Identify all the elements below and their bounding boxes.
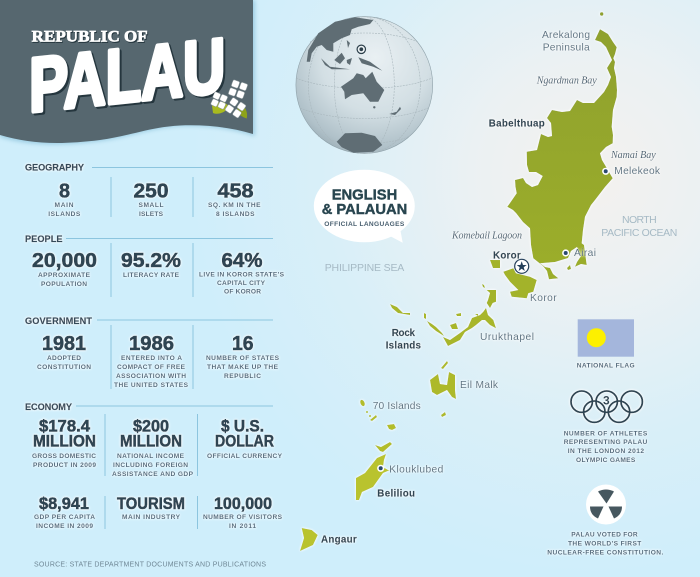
title: palau: PALAU xyxy=(29,23,225,129)
stat: 8 main islands: ISLANDS xyxy=(48,211,81,218)
stat: tourism xyxy=(117,494,185,521)
stat: visitors: IN 2011 xyxy=(229,523,256,530)
marker: melekeok xyxy=(602,168,609,175)
caption: olympic athletes: OLYMPIC GAMES xyxy=(576,457,636,464)
label: arekalong peninsula xyxy=(542,30,590,54)
island: angaur xyxy=(300,528,318,551)
speech bubble: official languages: ENGLISH xyxy=(332,186,397,203)
caption: nuclear-free constitution: THE WORLD'S FIRST xyxy=(568,540,641,548)
stat: currency: OFFICIAL CURRENCY xyxy=(207,453,283,460)
source note: SOURCE: STATE DEPARTMENT DOCUMENTS AND PUBLICATIONS xyxy=(34,562,266,568)
stat: gdp xyxy=(32,417,96,469)
label: klouklubed: Klouklubed xyxy=(389,464,444,475)
stat: 20,000 population: APPROXIMATE xyxy=(38,272,91,279)
speech bubble: official languages: OFFICIAL LANGUAGES xyxy=(324,221,405,228)
stat: 250 small islets xyxy=(134,181,168,218)
stat: 1981 xyxy=(37,333,91,371)
caption: olympic athletes: NUMBER OF ATHLETES xyxy=(564,430,648,437)
stat: gdp: MILLION xyxy=(33,432,96,451)
stat: 16 states: REPUBLIC xyxy=(224,373,261,380)
stat: currency xyxy=(207,417,283,460)
icon: nuclear free symbol xyxy=(586,484,626,524)
stat: national income: INCLUDING FOREIGN xyxy=(113,462,188,469)
icon: flowers and leaves xyxy=(210,80,248,118)
stat: 250 small islets: ISLETS xyxy=(139,211,164,218)
stat: 1986: COMPACT OF FREE xyxy=(117,364,186,371)
stat: 16 states: NUMBER OF STATES xyxy=(206,355,280,362)
islands: 70 islands xyxy=(359,399,396,452)
stat: 20,000 population xyxy=(32,250,97,288)
island: babelthuap xyxy=(507,29,617,279)
stat: 8 main islands xyxy=(48,181,81,218)
marker: klouklubed xyxy=(377,465,384,472)
caption: national flag: NATIONAL FLAG xyxy=(577,362,635,369)
islands: koror xyxy=(482,260,537,308)
islands: urukthapel and rock islands xyxy=(390,304,496,346)
caption: olympic athletes xyxy=(564,430,648,464)
stat: 1986: 1986 xyxy=(129,333,174,355)
heading: people: PEOPLE xyxy=(25,234,62,244)
heading: geography: GEOGRAPHY xyxy=(25,163,84,173)
island: small north islet xyxy=(600,12,603,16)
stat: 1986: ENTERED INTO A xyxy=(121,355,182,362)
stat: currency: $ U.S. xyxy=(221,417,264,436)
label: beliliou: Beliliou xyxy=(377,489,415,500)
stat: 20,000 population: 20,000 xyxy=(32,250,97,272)
label: koror bold: Koror xyxy=(493,250,521,261)
stat: visitors xyxy=(203,494,283,530)
stat: 64% live in koror: LIVE IN KOROR STATE'S xyxy=(199,272,285,278)
marker: airai xyxy=(562,249,569,257)
stat: visitors: 100,000 xyxy=(214,494,272,513)
label: philippine sea: PHILIPPINE SEA xyxy=(325,262,404,274)
panel: facts xyxy=(25,163,285,530)
stat: gdp: PRODUCT IN 2009 xyxy=(33,462,96,469)
speech bubble: official languages xyxy=(314,170,415,243)
stat: national income: ASSISTANCE AND GDP xyxy=(112,471,194,478)
label: north pacific ocean xyxy=(601,214,677,239)
stat: 64% live in koror: CAPITAL CITY xyxy=(217,280,266,287)
map labels xyxy=(321,30,661,546)
caption: nuclear-free constitution: PALAU VOTED FOR xyxy=(571,532,638,539)
stat: gdp per capita: GDP PER CAPITA xyxy=(34,514,95,521)
label: melekeok: Melekeok xyxy=(614,166,661,177)
stat: gdp per capita xyxy=(34,494,95,530)
stat: 458 sq km: SQ. KM IN THE xyxy=(208,202,261,209)
island: eil malk xyxy=(430,361,456,417)
caption: olympic athletes: REPRESENTING PALAU xyxy=(564,439,648,446)
label: eil malk: Eil Malk xyxy=(460,380,499,391)
stat: currency: DOLLAR xyxy=(215,432,274,451)
caption: olympic athletes: IN THE LONDON 2012 xyxy=(568,448,644,455)
stat: 8 main islands: MAIN xyxy=(54,202,74,209)
island: airai islet xyxy=(567,265,571,270)
stat: 458 sq km: 458 xyxy=(218,181,254,203)
label: namai bay: Namai Bay xyxy=(610,150,656,161)
stat: national income: MILLION xyxy=(120,432,182,451)
title: palau: PALAU xyxy=(31,25,227,131)
stat: gdp per capita: $8,941 xyxy=(39,494,89,513)
icon: palau location marker xyxy=(357,45,365,54)
heading: government: GOVERNMENT xyxy=(25,316,92,326)
title: republic of: REPUBLIC OF xyxy=(32,29,148,46)
stat: tourism: TOURISM xyxy=(117,494,185,513)
stat: 250 small islets: 250 xyxy=(134,181,168,203)
stat: 1986 xyxy=(114,333,189,389)
banner xyxy=(0,0,255,144)
label: arekalong peninsula: Arekalong xyxy=(542,30,590,41)
label: urukthapel: Urukthapel xyxy=(480,332,534,343)
title: republic of: REPUBLIC OF xyxy=(32,30,149,47)
stat: 20,000 population: POPULATION xyxy=(41,281,87,288)
stat: 1981: ADOPTED xyxy=(47,355,81,362)
stat: 64% live in koror: OF KOROR xyxy=(224,288,261,296)
map: islands xyxy=(300,12,617,551)
label: ngardman bay: Ngardman Bay xyxy=(536,75,597,86)
label: angaur: Angaur xyxy=(321,535,357,546)
stat: gdp: $178.4 xyxy=(39,417,91,436)
stat: national income: NATIONAL INCOME xyxy=(117,453,185,460)
label: koror: Koror xyxy=(530,293,557,304)
stat: gdp: GROSS DOMESTIC xyxy=(32,453,96,460)
stat: 458 sq km: 8 ISLANDS xyxy=(216,211,255,218)
label: 70 islands: 70 Islands xyxy=(373,401,421,412)
olympic rings xyxy=(564,391,648,464)
label: north pacific ocean: NORTH xyxy=(622,214,657,226)
label: arekalong peninsula: Peninsula xyxy=(543,43,590,54)
label: komebail lagoon: Komebail Lagoon xyxy=(451,231,522,242)
marker: koror capital star xyxy=(515,259,529,273)
caption: nuclear-free constitution: NUCLEAR-FREE CONSTITUTION. xyxy=(547,550,663,556)
label: rock islands xyxy=(386,328,422,352)
caption: nuclear-free constitution xyxy=(547,532,663,556)
stat: 1981: CONSTITUTION xyxy=(37,364,91,371)
stat: 16 states xyxy=(206,333,280,380)
stat: national income xyxy=(112,417,194,478)
heading: economy: ECONOMY xyxy=(25,402,72,412)
label: rock islands: Islands xyxy=(386,341,422,352)
national flag xyxy=(577,319,635,369)
stat: gdp per capita: INCOME IN 2009 xyxy=(36,523,93,530)
stat: 8 main islands: 8 xyxy=(59,181,70,203)
label: babelthuap: Babelthuap xyxy=(489,119,545,130)
stat: 1986: ASSOCIATION WITH xyxy=(116,373,186,380)
stat: 64% live in koror xyxy=(199,250,285,296)
stat: visitors: NUMBER OF VISITORS xyxy=(203,514,283,521)
stat: tourism: MAIN INDUSTRY xyxy=(122,514,181,521)
globe xyxy=(296,17,433,153)
map markers xyxy=(377,168,609,472)
olympic rings: 3 xyxy=(603,394,610,408)
stat: 458 sq km xyxy=(208,181,261,218)
island: beliliou xyxy=(356,454,390,500)
label: rock islands: Rock xyxy=(392,328,416,339)
stat: national income: $200 xyxy=(133,417,169,436)
stat: 1986: THE UNITED STATES xyxy=(114,382,189,389)
stat: 64% live in koror: 64% xyxy=(222,250,263,272)
speech bubble: official languages: & PALAUAN xyxy=(322,201,407,218)
stat: 250 small islets: SMALL xyxy=(138,202,164,209)
stat: 95.2% literacy: LITERACY RATE xyxy=(123,272,180,279)
stat: 16 states: 16 xyxy=(232,333,254,355)
stat: 16 states: THAT MAKE UP THE xyxy=(207,364,279,371)
stat: 1981: 1981 xyxy=(42,333,86,355)
label: north pacific ocean: PACIFIC OCEAN xyxy=(601,227,677,239)
label: airai: Airai xyxy=(574,248,596,259)
stat: 95.2% literacy: 95.2% xyxy=(121,250,181,272)
